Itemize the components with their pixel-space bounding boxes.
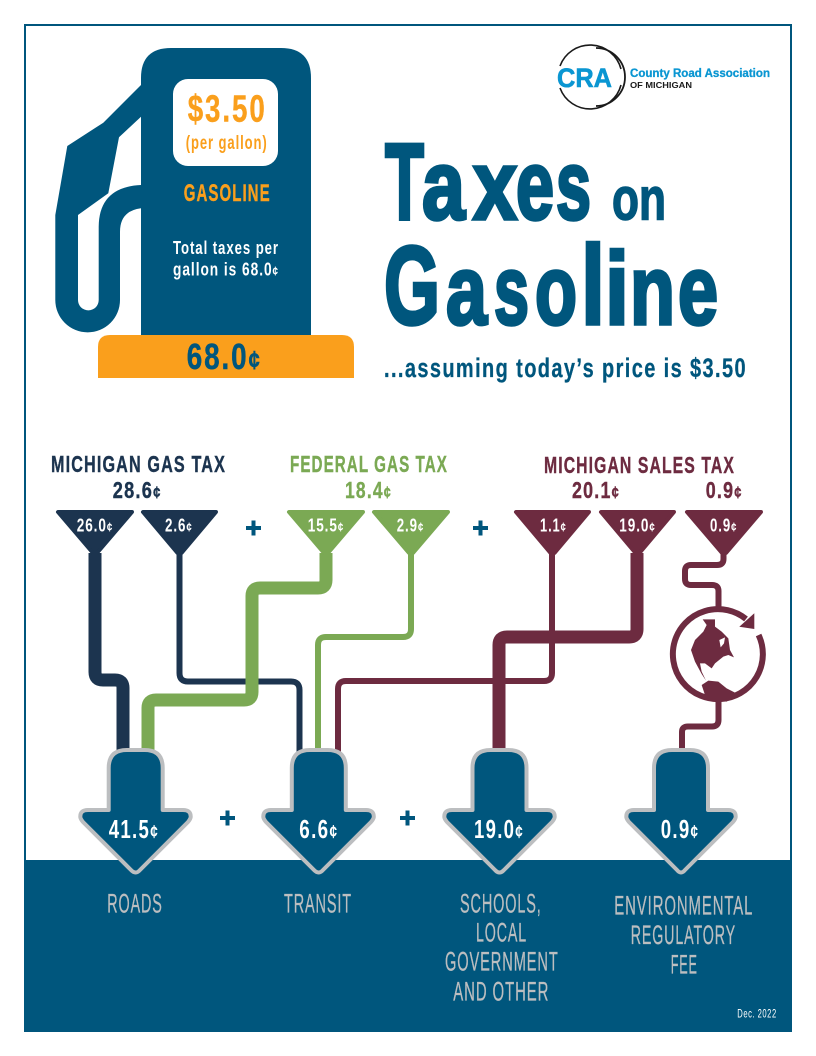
heading: Michigan gas tax: MICHIGAN GAS TAX xyxy=(51,451,226,477)
heading: federal gas tax xyxy=(290,451,448,503)
heading: Michigan sales tax: 20.1¢ xyxy=(572,477,620,503)
title: s xyxy=(494,235,529,345)
funnel values xyxy=(77,516,737,536)
funnel: 26.0 xyxy=(58,512,132,553)
arrow: roads xyxy=(80,750,191,872)
funnel: 15.5 xyxy=(289,512,363,553)
label: transit: TRANSIT xyxy=(284,889,352,919)
plus signs xyxy=(220,520,488,826)
logo ring xyxy=(560,45,625,109)
pipe: 2.6 navy to transit xyxy=(180,553,300,752)
pipe: 26.0 navy to roads xyxy=(95,553,123,752)
heading: federal gas tax: 18.4¢ xyxy=(345,477,392,503)
funnel values: 2.6¢ xyxy=(165,516,193,536)
icon: globe with circular arrow xyxy=(673,609,763,702)
title: e xyxy=(678,235,718,345)
title: x xyxy=(473,130,517,240)
funnel values: 0.9¢ xyxy=(710,516,737,536)
funnels xyxy=(58,512,761,553)
pipe: 19.0 maroon to schools xyxy=(499,553,637,752)
pump body xyxy=(141,48,311,335)
arrow: environmental fee xyxy=(626,750,736,872)
label: roads: ROADS xyxy=(107,889,163,919)
logo: County Road Association of Michigan xyxy=(557,45,770,109)
logo initials: CRA xyxy=(557,63,612,93)
price unit: (per gallon) xyxy=(186,133,268,154)
label: schools, local government and other: LOCAL xyxy=(476,918,527,948)
heading: federal gas tax: FEDERAL GAS TAX xyxy=(290,451,448,477)
title: a xyxy=(422,130,466,240)
arrow head xyxy=(739,613,754,629)
pipe: 0.9 maroon to globe xyxy=(685,553,724,612)
pipe: 2.9 green to transit xyxy=(318,553,411,752)
funnel: 19.0 xyxy=(601,512,674,553)
pump nozzle and hose xyxy=(55,85,141,332)
title: G xyxy=(384,224,440,348)
arrow values xyxy=(109,814,699,844)
label: schools, local government and other: GOVERNMENT xyxy=(445,947,559,977)
title: e xyxy=(516,130,554,240)
fuel label: GASOLINE xyxy=(184,180,271,207)
flow pipes xyxy=(95,553,724,752)
logo subtitle: OF MICHIGAN xyxy=(630,80,692,90)
funnel values: 26.0¢ xyxy=(77,516,113,536)
total taxes note: Total taxes per xyxy=(173,238,279,258)
bottom band xyxy=(24,860,792,1032)
price panel xyxy=(173,79,278,166)
arrow: transit xyxy=(263,750,374,872)
total taxes note xyxy=(173,238,279,280)
label: schools, local government and other: SCHOOLS, xyxy=(460,889,542,919)
arrow values: 6.6¢ xyxy=(299,814,338,844)
pipe: globe to environmental fee xyxy=(682,700,718,752)
funnel: 0.9 xyxy=(687,512,761,553)
title: i xyxy=(605,231,629,346)
circular arrow ring xyxy=(673,609,763,699)
date note: Dec. 2022 xyxy=(737,1006,777,1020)
label: schools, local government and other xyxy=(445,889,559,1007)
heading: Michigan gas tax xyxy=(51,451,226,503)
funnel: 2.9 xyxy=(374,512,448,553)
label: environmental regulatory fee xyxy=(614,891,753,979)
heading: Michigan sales tax: 0.9¢ xyxy=(706,477,743,503)
title: T xyxy=(385,121,424,243)
label: environmental regulatory fee: FEE xyxy=(671,949,698,979)
arrow values: 19.0¢ xyxy=(474,814,524,844)
arrow values: 0.9¢ xyxy=(661,814,699,844)
price: $3.50 xyxy=(188,89,267,131)
total tax amount: 68.0¢ xyxy=(187,336,262,377)
funnel values: 15.5¢ xyxy=(308,516,344,536)
label: schools, local government and other: AND OTHER xyxy=(453,977,549,1007)
title: s xyxy=(556,130,591,240)
total taxes note: gallon is 68.0¢ xyxy=(173,260,279,280)
icon: gas pump xyxy=(55,48,354,378)
funnel values: 19.0¢ xyxy=(619,516,656,536)
heading: Michigan sales tax: MICHIGAN SALES TAX xyxy=(544,452,735,478)
heading: Michigan sales tax xyxy=(544,452,743,503)
title: o xyxy=(535,235,577,345)
arrow: schools xyxy=(444,750,555,872)
pipe: 15.5 green to roads xyxy=(148,553,326,752)
funnel: 1.1 xyxy=(516,512,589,553)
title: a xyxy=(446,235,488,345)
title: on xyxy=(612,166,666,232)
heading: Michigan gas tax: 28.6¢ xyxy=(113,477,162,503)
pump base xyxy=(98,335,354,378)
logo name: County Road Association xyxy=(630,66,770,80)
title: l xyxy=(581,223,605,348)
funnel values: 2.9¢ xyxy=(397,516,424,536)
continents xyxy=(691,619,735,702)
funnel values: 1.1¢ xyxy=(540,516,567,536)
arrows xyxy=(80,750,736,872)
title: n xyxy=(630,235,675,345)
pipe: 1.1 maroon to transit xyxy=(338,553,552,752)
title xyxy=(384,121,718,348)
arrow values: 41.5¢ xyxy=(109,814,159,844)
funnel: 2.6 xyxy=(143,512,216,553)
